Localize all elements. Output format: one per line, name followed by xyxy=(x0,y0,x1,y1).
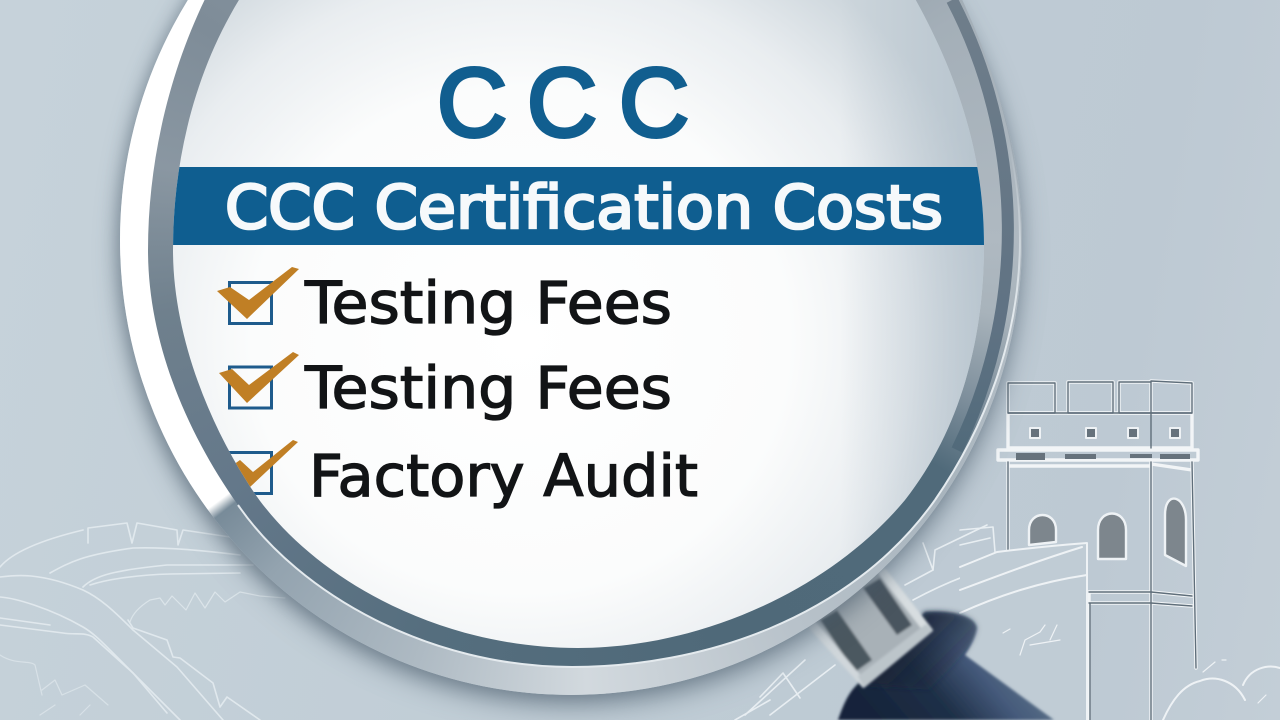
rim inner band xyxy=(148,0,1017,666)
right great wall segment xyxy=(735,525,1087,720)
logo letters CCC: CCC xyxy=(437,48,689,157)
watchtower xyxy=(998,381,1198,720)
list item: testing fees 1: Testing Fees xyxy=(304,269,672,337)
tower loopholes xyxy=(1030,428,1180,438)
heading banner: CCC Certification Costs xyxy=(225,173,943,243)
magnifier lens with content xyxy=(173,0,984,648)
tower windows xyxy=(1029,499,1186,566)
list item: testing fees 2: Testing Fees xyxy=(304,354,672,422)
left great wall line art xyxy=(0,523,285,720)
list item: factory audit: Factory Audit xyxy=(309,442,698,510)
metal ferrule xyxy=(808,568,933,688)
wall walkway in front of tower xyxy=(960,543,1087,720)
bushes xyxy=(1163,660,1280,720)
magnifying glass outer metal rim xyxy=(120,0,1022,695)
